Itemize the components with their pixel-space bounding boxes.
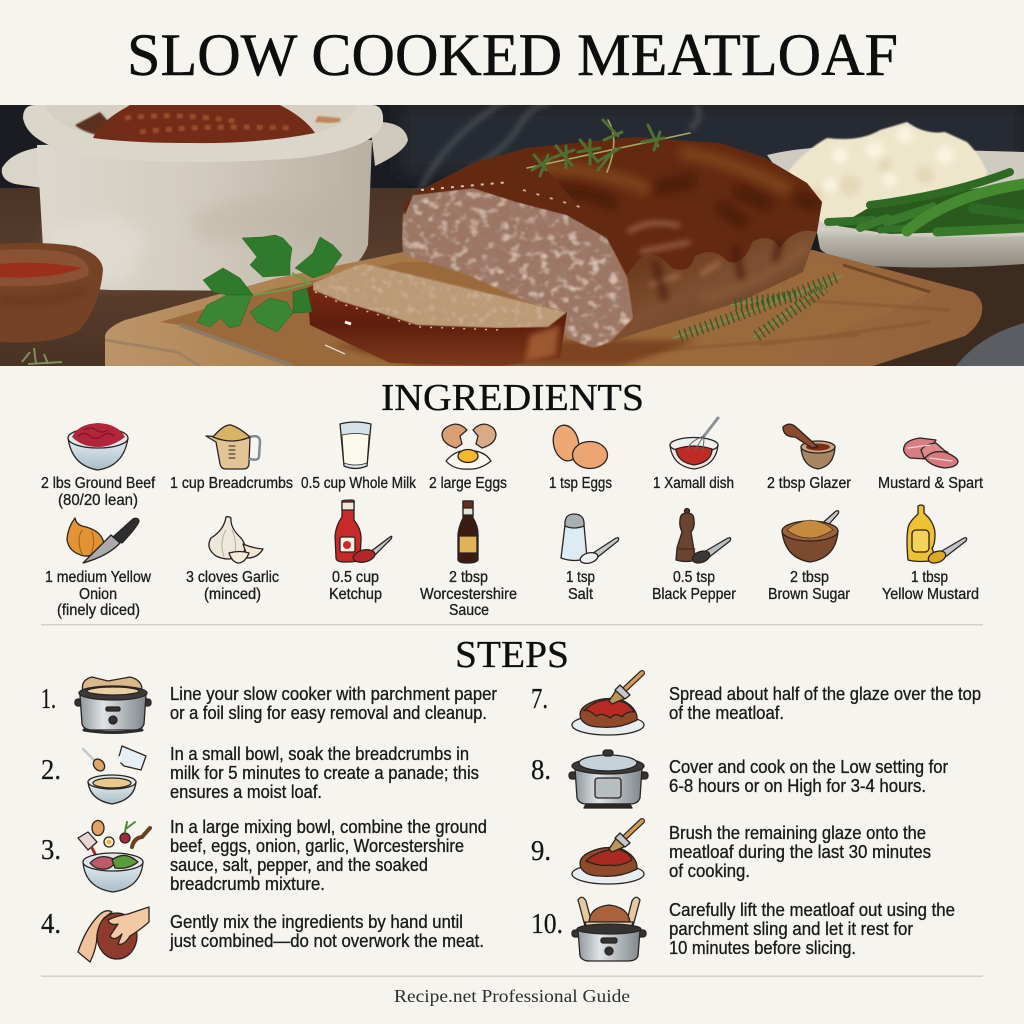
label: 0.5 cup <box>332 569 379 586</box>
label: 0.5 tsp <box>673 569 715 586</box>
footer: Recipe.net Professional Guide <box>394 986 630 1006</box>
instruction: In a small bowl, soak the breadcrumbs in <box>170 744 469 764</box>
ingredient: yellow onion <box>45 518 151 619</box>
wooden sauce bowl <box>0 243 103 342</box>
label <box>329 569 382 603</box>
number: 9. <box>531 835 551 867</box>
label: Onion <box>79 586 117 603</box>
icon: lifting meatloaf from slow cooker <box>572 897 646 961</box>
instruction: Brush the remaining glaze onto the <box>669 823 926 843</box>
instruction: meatloaf during the last 30 minutes <box>669 842 931 862</box>
label: 2 tbsp <box>449 569 488 586</box>
ingredient: whole milk <box>301 422 417 492</box>
instruction: Carefully lift the meatloaf out using the <box>669 900 955 920</box>
ingredient: garlic <box>186 517 279 603</box>
instruction <box>170 744 479 802</box>
icon: sugar bowl with spoon <box>782 511 839 562</box>
hero photo: sliced glazed meatloaf on wooden board <box>0 102 1024 366</box>
icon: combine ingredients in bowl <box>78 820 150 892</box>
step 4 <box>41 907 484 962</box>
front meatloaf slice <box>307 263 567 366</box>
ingredient: salt <box>561 514 619 603</box>
instruction: or a foil sling for easy removal and cleanup. <box>170 703 487 723</box>
step 2 <box>41 744 479 804</box>
label <box>652 569 737 603</box>
label <box>186 569 279 603</box>
icon: hands mixing meat <box>78 907 149 962</box>
instruction: breadcrumb mixture. <box>170 874 325 894</box>
label: Ketchup <box>329 586 382 603</box>
number: 4. <box>41 908 61 940</box>
ingredient: black pepper <box>652 508 737 603</box>
label <box>768 569 851 603</box>
ingredient: small dish <box>653 418 734 492</box>
label <box>566 569 595 603</box>
icon: brushing glaze on meatloaf <box>572 673 644 735</box>
label: 1 medium Yellow <box>45 569 151 586</box>
icon: whisk in bowl <box>670 418 718 469</box>
label: Brown Sugar <box>768 586 851 603</box>
label: 0.5 cup Whole Milk <box>301 475 417 492</box>
instruction: Spread about half of the glaze over the top <box>669 684 981 704</box>
instruction: In a large mixing bowl, combine the ground <box>170 817 487 837</box>
label: 1 Xamall dish <box>653 475 734 492</box>
instruction: sauce, salt, pepper, and the soaked <box>170 855 428 875</box>
number: 10. <box>531 908 563 940</box>
instruction: Gently mix the ingredients by hand until <box>170 912 463 932</box>
plate with mashed potatoes and green beans <box>767 122 1024 268</box>
label: 2 large Eggs <box>429 475 507 492</box>
heading: ingredients: INGREDIENTS <box>381 377 644 419</box>
instruction: 6-8 hours or on High for 3-4 hours. <box>669 776 926 796</box>
title: SLOW COOKED MEATLOAF <box>127 22 898 88</box>
instruction: of the meatloaf. <box>669 703 784 723</box>
icon: covered slow cooker <box>569 750 648 808</box>
instruction <box>669 684 981 723</box>
label: Worcestershire <box>420 586 517 603</box>
instruction: Cover and cook on the Low setting for <box>669 757 948 777</box>
label <box>45 569 151 619</box>
number: 8. <box>531 754 551 786</box>
label: 1 tbsp <box>911 569 948 586</box>
thyme sprig on board <box>673 275 843 338</box>
cutting board <box>105 250 982 366</box>
icon: garlic bulb and cloves <box>209 517 263 563</box>
ingredient: brown sugar <box>768 511 851 603</box>
instruction <box>669 757 948 796</box>
label: 2 lbs Ground Beef <box>41 475 155 492</box>
steam <box>420 102 699 190</box>
icon: spoon and small bowl <box>783 424 835 469</box>
icon: beef bowl <box>68 423 128 470</box>
label <box>882 569 979 603</box>
ingredient: worcestershire sauce <box>420 501 517 619</box>
label: 1 cup Breadcrumbs <box>170 475 293 492</box>
instruction: parchment sling and let it rest for <box>669 919 913 939</box>
label: Salt <box>568 586 593 603</box>
label: 2 tbsp Glazer <box>767 475 852 492</box>
icon: mustard bottle and spoon <box>907 505 967 565</box>
ceramic slow cooker pot <box>2 105 408 291</box>
step 7 <box>531 673 981 735</box>
icon: sauce bottle <box>458 501 478 563</box>
label: (minced) <box>204 586 261 603</box>
number: 1. <box>41 683 56 715</box>
ingredient: ground beef <box>41 423 155 509</box>
napkin <box>956 323 1024 366</box>
label: Sauce <box>449 602 489 619</box>
instruction: milk for 5 minutes to create a panade; this <box>170 763 479 783</box>
number: 2. <box>41 754 61 786</box>
thyme sprig on top <box>527 120 690 176</box>
instruction <box>669 900 955 958</box>
icon: brushing remaining glaze <box>572 821 644 884</box>
instruction <box>169 912 484 951</box>
label <box>420 569 517 619</box>
instruction: beef, eggs, onion, garlic, Worcestershire <box>170 836 464 856</box>
step 3 <box>41 817 487 894</box>
label: (finely diced) <box>57 602 140 619</box>
step 9 <box>531 821 931 884</box>
instruction: just combined—do not overwork the meat. <box>169 931 484 951</box>
label: 2 tbsp <box>790 569 829 586</box>
instruction <box>170 817 487 894</box>
icon: ham slices <box>904 438 958 468</box>
icon: measuring cup <box>206 425 260 469</box>
icon: cracked eggs <box>442 424 496 469</box>
icon: pepper mill and spoon <box>676 508 731 565</box>
label: 1 tsp Eggs <box>549 475 612 492</box>
ingredient: glazer <box>767 424 852 492</box>
parsley garnish <box>197 235 342 332</box>
step 8 <box>531 750 948 808</box>
ingredient: yellow mustard <box>882 505 979 603</box>
number: 7. <box>531 683 548 715</box>
label: (80/20 lean) <box>58 492 138 509</box>
label: Black Pepper <box>652 586 737 603</box>
main meatloaf <box>402 137 822 348</box>
herb sprig bottom left <box>22 348 62 364</box>
label <box>41 475 155 509</box>
number: 3. <box>41 834 61 866</box>
label: Mustard & Spart <box>878 475 983 492</box>
icon: soak breadcrumbs in milk <box>83 746 146 804</box>
ingredient: ketchup <box>329 500 392 603</box>
label: Yellow Mustard <box>882 586 979 603</box>
instruction: ensures a moist loaf. <box>170 782 322 802</box>
instruction: of cooking. <box>669 861 750 881</box>
instruction: 10 minutes before slicing. <box>669 938 856 958</box>
icon: salt shaker and spoon <box>561 514 619 565</box>
icon: two eggs <box>550 423 608 468</box>
icon: onion and knife <box>67 518 139 563</box>
label: 1 tsp <box>566 569 595 586</box>
ingredient: mustard and spart <box>878 438 983 492</box>
instruction <box>170 684 497 723</box>
instruction: Line your slow cooker with parchment paper <box>170 684 497 704</box>
label: 3 cloves Garlic <box>186 569 279 586</box>
ingredient: breadcrumbs <box>170 425 293 492</box>
step 10 <box>531 897 955 961</box>
icon: ketchup bottle and spoon <box>335 500 392 564</box>
icon: milk glass <box>340 422 371 468</box>
instruction <box>669 823 931 881</box>
icon: slow cooker with parchment <box>75 677 151 732</box>
ingredient: 1 tsp eggs <box>549 423 612 492</box>
heading: steps: STEPS <box>455 634 569 676</box>
step 1 <box>41 677 497 732</box>
ingredient: large eggs <box>429 424 507 492</box>
